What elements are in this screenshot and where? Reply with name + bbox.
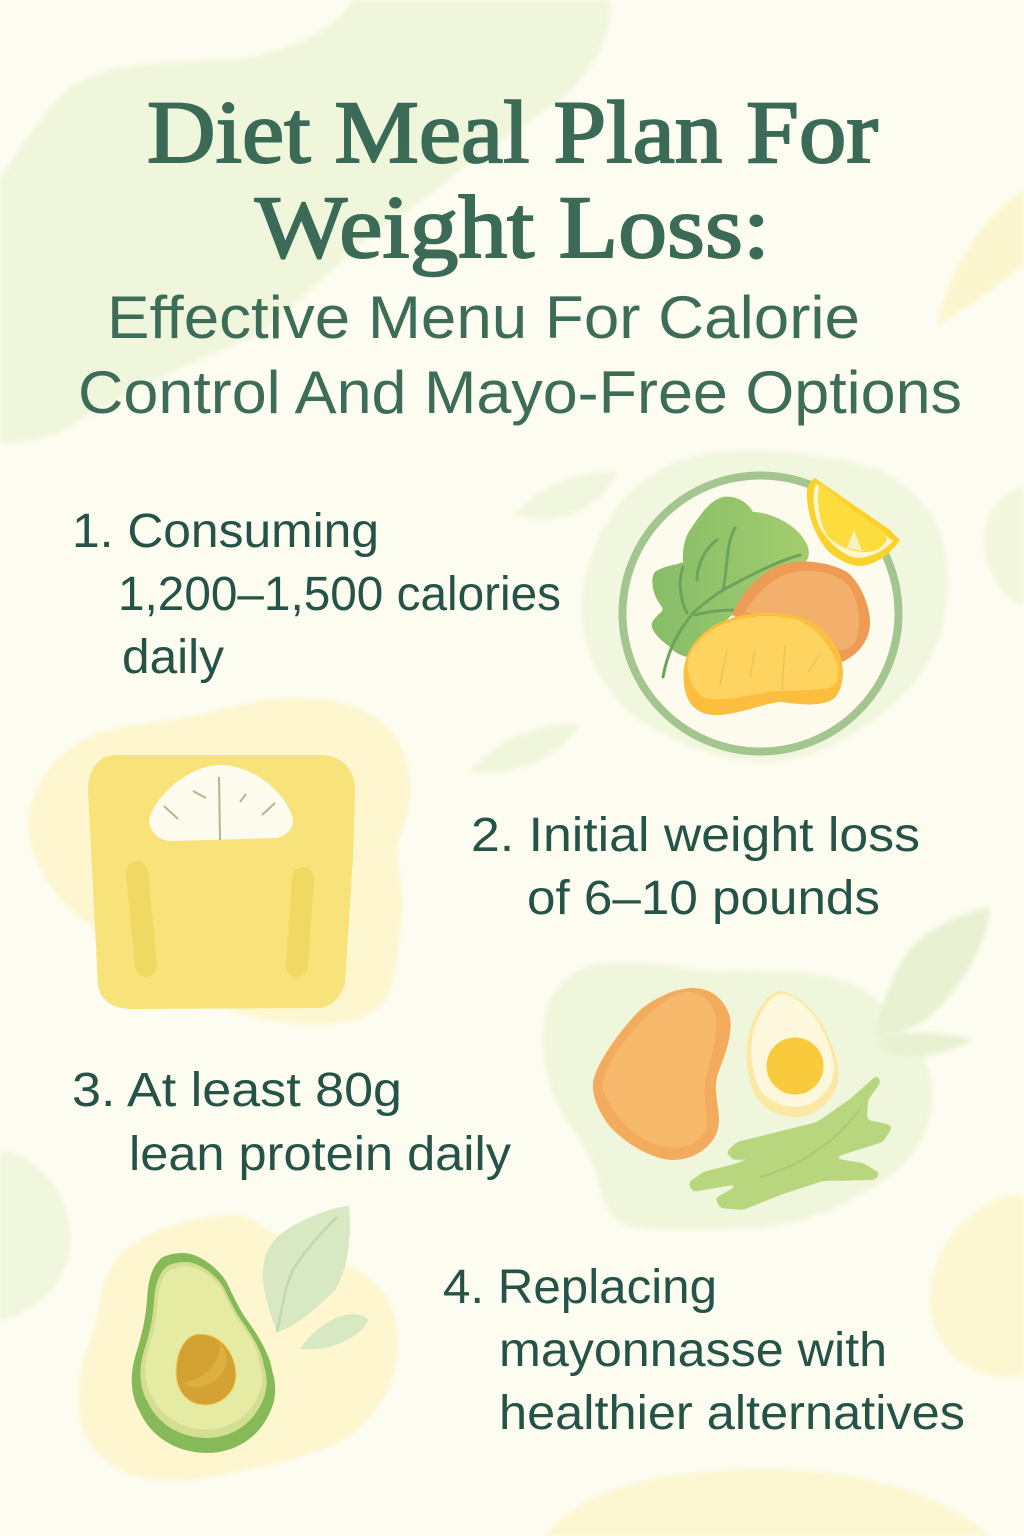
item 3 text: lean protein daily — [129, 1128, 511, 1181]
icon: protein plate — [543, 908, 990, 1230]
scale dial — [149, 765, 293, 841]
item 1 text: 1. Consuming — [72, 505, 379, 558]
title: Weight Loss: — [255, 179, 770, 277]
icon: leaves — [263, 1206, 368, 1349]
icon: sweet potato — [732, 561, 870, 662]
item 4 text: 4. Replacing — [443, 1261, 717, 1314]
item 2 text: 2. Initial weight loss — [471, 809, 920, 862]
icon: boiled egg — [747, 991, 838, 1117]
item 4 text: healthier alternatives — [499, 1387, 965, 1440]
item 3 text: 3. At least 80g — [72, 1064, 402, 1117]
icon: sweet potato — [593, 988, 731, 1160]
icon: lemon — [807, 478, 900, 566]
item 4 text — [443, 1261, 965, 1440]
title — [147, 84, 878, 277]
title: Diet Meal Plan For — [147, 84, 878, 182]
icon: bathroom scale — [28, 698, 410, 1024]
icon: yellow potato — [684, 613, 843, 715]
item 1 text — [72, 505, 561, 684]
icon: green beans — [688, 1075, 893, 1210]
item 1 text: 1,200–1,500 calories — [118, 568, 561, 621]
item 3 text — [72, 1064, 511, 1181]
item 4 text: mayonnasse with — [499, 1324, 887, 1377]
icon: avocado fruit — [132, 1253, 275, 1453]
item 2 text — [471, 809, 920, 925]
subtitle: Control And Mayo-Free Options — [78, 359, 962, 426]
subtitle: Effective Menu For Calorie — [107, 284, 860, 351]
item 1 text: daily — [122, 631, 224, 684]
icon: lettuce leaf — [652, 497, 809, 677]
item 2 text: of 6–10 pounds — [527, 872, 880, 925]
subtitle — [78, 284, 962, 426]
icon: avocado — [78, 1206, 398, 1481]
icon: plate with salad — [582, 451, 947, 762]
icon: background leaf — [873, 908, 990, 1057]
